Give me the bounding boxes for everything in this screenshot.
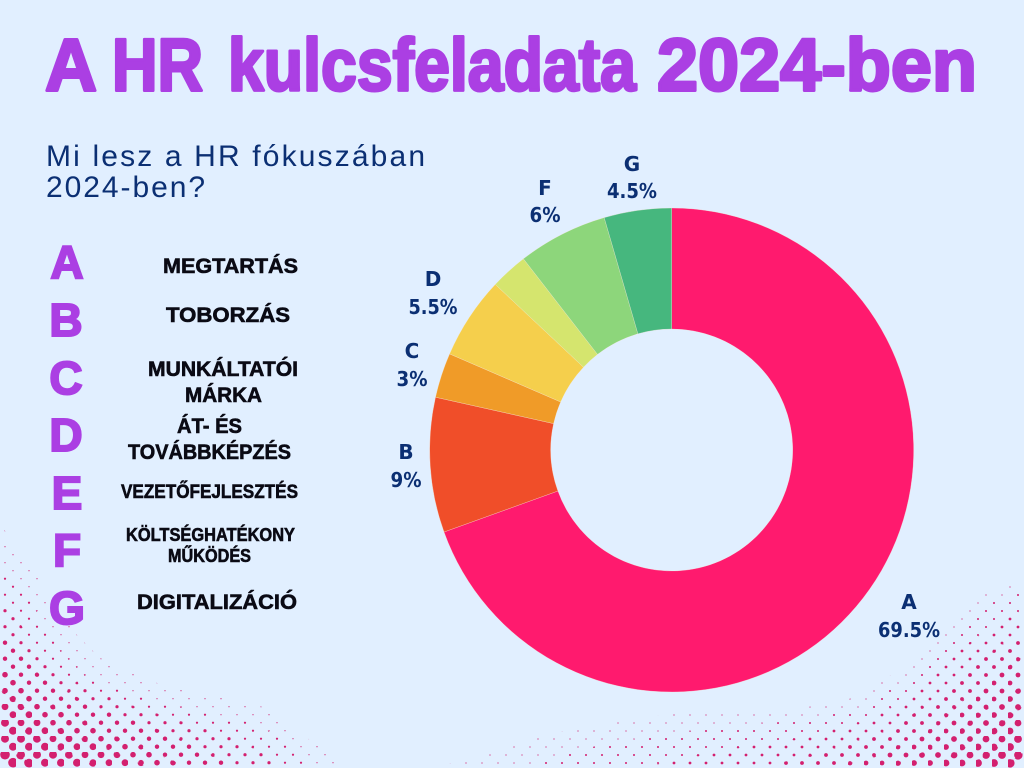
label C: [396, 339, 428, 391]
segment G 4.5%: [604, 208, 672, 334]
label A: A: [901, 590, 917, 614]
donut chart: [430, 208, 914, 692]
segment D 5.5%: [450, 284, 584, 402]
segment E: [495, 259, 598, 367]
label B: B: [398, 440, 414, 464]
legend item A: MEGTARTÁS: [163, 255, 298, 278]
title: kulcsfeladata: [228, 24, 637, 106]
legend: [49, 236, 298, 634]
segment C 3%: [436, 354, 561, 424]
legend item G: G: [49, 582, 85, 634]
legend item G: DIGITALIZÁCIÓ: [137, 590, 297, 614]
legend item C: [49, 352, 298, 407]
legend item A: [50, 236, 298, 288]
legend item F: F: [53, 524, 81, 576]
subtitle: 2024-ben?: [46, 171, 205, 204]
label G: [607, 152, 657, 203]
label F: F: [538, 176, 552, 200]
subtitle: [46, 140, 425, 204]
subtitle: Mi lesz a HR fókuszában: [46, 140, 425, 173]
label G: G: [624, 152, 640, 176]
title: [45, 24, 977, 106]
label B: 9%: [390, 468, 422, 492]
segment B 9%: [430, 397, 558, 532]
legend item D: [49, 409, 291, 464]
segment A 69.5%: [444, 208, 914, 692]
legend item F: [53, 524, 295, 576]
title: HR: [112, 24, 203, 106]
label F: 6%: [530, 203, 560, 227]
label D: 5.5%: [408, 295, 458, 319]
legend item E: VEZETŐFEJLESZTÉS: [121, 481, 298, 503]
label A: [878, 590, 940, 642]
legend item D: TOVÁBBKÉPZÉS: [128, 441, 291, 464]
segment F 6%: [523, 218, 638, 354]
legend item A: A: [50, 236, 84, 288]
legend item D: ÁT- ÉS: [177, 415, 242, 438]
title: 2024-ben: [657, 24, 977, 106]
legend item C: MÁRKA: [185, 384, 262, 407]
legend item B: B: [49, 294, 83, 346]
label C: C: [405, 339, 419, 363]
label G: 4.5%: [607, 179, 657, 203]
legend item F: MŰKÖDÉS: [168, 545, 251, 566]
label D: [408, 267, 458, 319]
legend item C: C: [49, 352, 83, 404]
legend item D: D: [49, 409, 83, 461]
legend item G: [49, 582, 297, 634]
label D: D: [425, 267, 441, 291]
legend item B: TOBORZÁS: [166, 304, 290, 327]
legend item F: KÖLTSÉGHATÉKONY: [126, 524, 295, 545]
legend item C: MUNKÁLTATÓI: [148, 357, 298, 381]
legend item E: [52, 467, 298, 519]
label B: [390, 440, 422, 492]
legend item B: [49, 294, 290, 346]
label A: 69.5%: [878, 618, 940, 642]
label C: 3%: [396, 367, 428, 391]
label F: [530, 176, 560, 227]
legend item E: E: [52, 467, 82, 519]
title: A: [45, 24, 97, 106]
